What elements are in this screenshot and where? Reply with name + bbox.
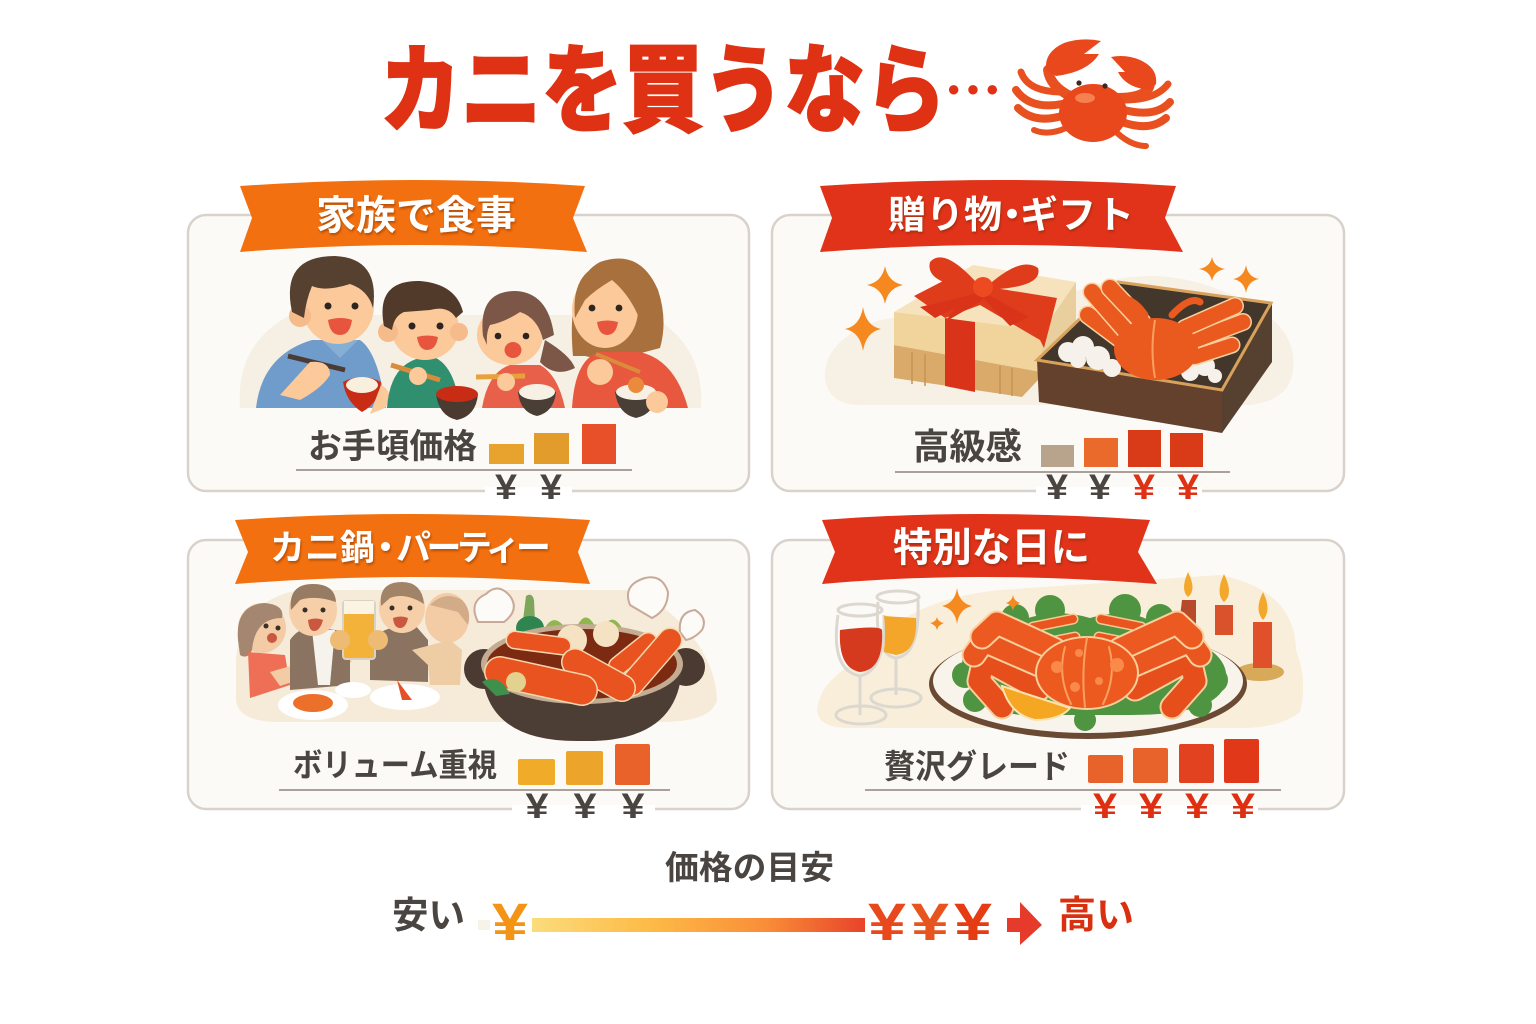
title: … <box>944 45 1002 129</box>
price bars <box>1041 430 1203 467</box>
yen rating: ¥ <box>526 787 549 826</box>
label: cheap: 安い <box>392 885 465 939</box>
yen rating: ¥ <box>1046 468 1069 507</box>
price bars <box>1088 739 1259 783</box>
illustration: gift box and boxed crab <box>825 257 1294 433</box>
icon: title crab <box>1016 39 1170 146</box>
yen rating: ¥ <box>495 468 518 507</box>
panel frame <box>772 215 1344 491</box>
legend heading: 価格の目安 <box>665 841 834 889</box>
yen rating: ¥ <box>1185 787 1210 826</box>
yen rating <box>1036 468 1202 507</box>
subheading: luxury grade: 贅沢グレード <box>884 740 1070 788</box>
ribbon heading: gift <box>820 180 1183 252</box>
ribbon heading: special day <box>822 514 1157 584</box>
yen rating: ¥ <box>1133 468 1156 507</box>
arrow <box>1007 902 1042 945</box>
yen rating: ¥ <box>1177 468 1200 507</box>
label: expensive: 高い <box>1058 884 1134 939</box>
yen rating <box>1081 787 1258 826</box>
panel frame <box>188 540 749 809</box>
ribbon heading: gift: ギフト <box>1020 184 1134 239</box>
yen high <box>868 893 993 952</box>
ribbon heading: special day: 特別な日に <box>893 515 1090 573</box>
ribbon heading: crab hotpot party: パーティー <box>396 520 548 571</box>
panel frame <box>772 540 1344 809</box>
legend: price guide <box>392 841 1134 952</box>
panel: gift <box>772 180 1344 507</box>
illustration: party and hotpot <box>236 577 717 741</box>
yen high: ¥ <box>868 893 907 952</box>
yen rating: ¥ <box>1089 468 1112 507</box>
ribbon heading: crab hotpot party: ・ <box>368 520 403 571</box>
gradient price bar <box>532 918 865 932</box>
yen rating: ¥ <box>1139 787 1164 826</box>
illustration: crab plate with wine and candles <box>817 572 1303 739</box>
subheading: affordable price: お手頃価格 <box>308 419 477 468</box>
panel: crab hotpot party <box>188 514 749 826</box>
yen rating: ¥ <box>1093 787 1118 826</box>
price bar start marker <box>478 920 490 930</box>
yen rating: ¥ <box>574 787 597 826</box>
ribbon heading: family meal <box>240 180 587 252</box>
yen rating: ¥ <box>540 468 563 507</box>
ribbon heading: gift: 贈り物 <box>888 184 1002 239</box>
ribbon heading: crab hotpot party: カニ鍋 <box>270 520 375 571</box>
panel: special day <box>772 514 1344 826</box>
yen low: ¥ <box>492 893 529 952</box>
ribbon heading: gift: ・ <box>993 184 1031 239</box>
panel frame <box>188 215 749 491</box>
price bars <box>489 424 616 464</box>
ribbon heading: family meal: 家族で食事 <box>316 183 516 241</box>
price bars <box>518 744 650 785</box>
illustration: family eating <box>240 256 701 420</box>
yen high: ¥ <box>954 893 993 952</box>
yen rating <box>485 468 572 507</box>
subheading: luxury feel: 高級感 <box>913 418 1022 470</box>
yen rating: ¥ <box>622 787 645 826</box>
subheading: volume focus: ボリューム重視 <box>293 740 497 786</box>
yen rating <box>512 787 655 826</box>
ribbon heading: crab hotpot party <box>235 514 590 584</box>
title: カニを買うなら <box>380 13 946 152</box>
yen rating: ¥ <box>1231 787 1256 826</box>
yen high: ¥ <box>911 893 950 952</box>
panel: family meal <box>188 180 749 507</box>
